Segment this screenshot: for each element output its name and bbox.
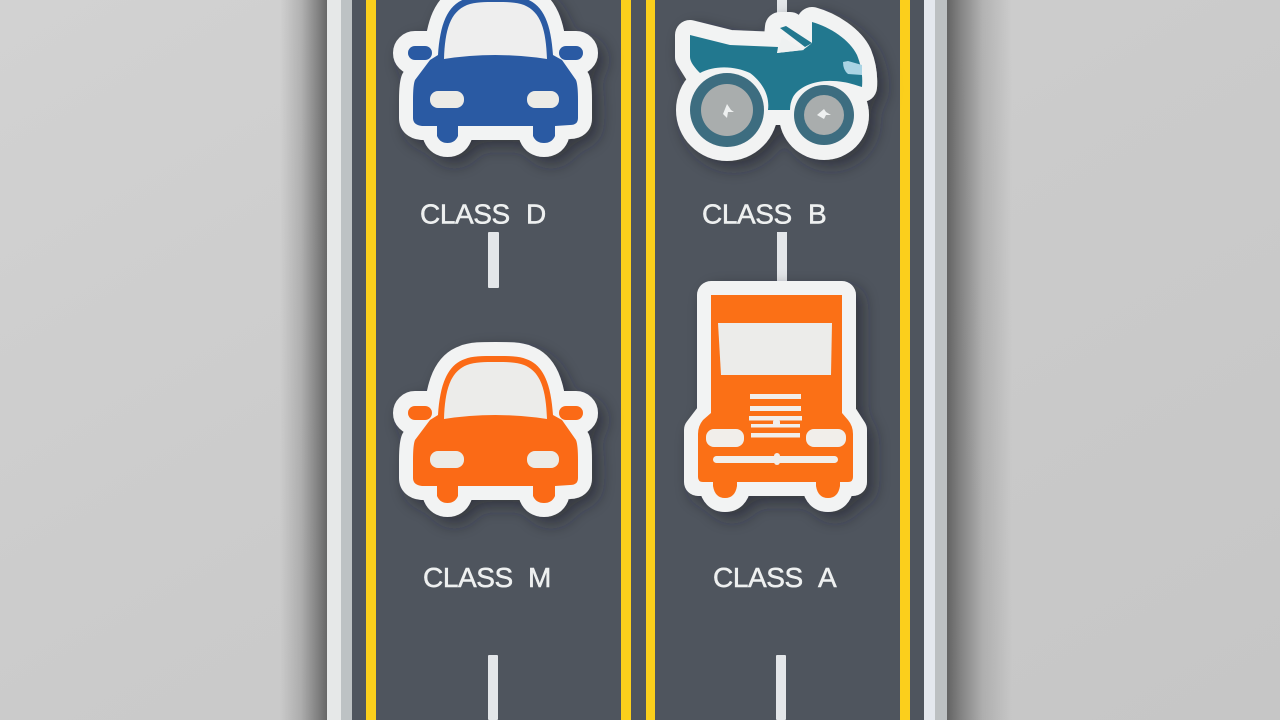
icon: teal motorcycle, class B (676, 22, 869, 161)
icon: orange truck, class A (698, 295, 853, 498)
label: class D: CLASS (420, 198, 510, 230)
icon: orange car, class M (408, 356, 583, 503)
label: class A: A (818, 562, 837, 593)
label: class A: CLASS (713, 562, 803, 593)
label: class B: CLASS (702, 198, 792, 230)
label: class B: B (808, 198, 826, 230)
icon: blue car, class D (408, 0, 583, 143)
label: class D: D (526, 198, 546, 230)
label: class M: M (528, 562, 551, 593)
lane dashes (488, 0, 787, 720)
road surface (327, 0, 947, 720)
label: class M: CLASS (423, 562, 513, 593)
